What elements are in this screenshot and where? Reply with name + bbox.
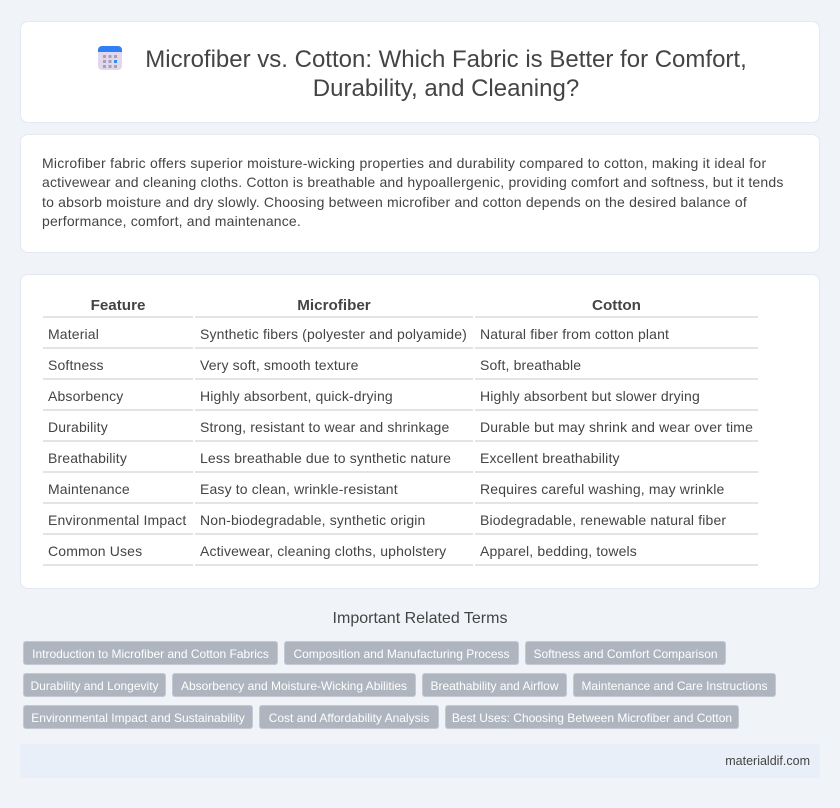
related term tags: Cost and Affordability Analysis bbox=[269, 711, 429, 725]
comparison table: Environmental Impact bbox=[48, 512, 186, 528]
panel: intro paragraph bbox=[20, 134, 820, 253]
related term tags: Composition and Manufacturing Process bbox=[293, 647, 510, 661]
panel: comparison table bbox=[20, 274, 820, 589]
comparison table: Durability bbox=[48, 419, 108, 435]
related term tags: Softness and Comfort Comparison bbox=[533, 647, 718, 661]
title: Microfiber vs. Cotton: Which Fabric is Better for Comfort, bbox=[145, 46, 747, 73]
comparison table: Very soft, smooth texture bbox=[200, 357, 359, 373]
comparison table: Common Uses bbox=[48, 543, 142, 559]
comparison table: Cotton bbox=[592, 297, 641, 314]
comparison table: Requires careful washing, may wrinkle bbox=[480, 481, 724, 497]
intro text: to absorb moisture and dry slowly. Choosing between microfiber and cotton depends on the desired balance of bbox=[42, 194, 747, 210]
related term tags bbox=[23, 641, 776, 729]
comparison table: Soft, breathable bbox=[480, 357, 581, 373]
header card bbox=[20, 21, 820, 123]
comparison table: Absorbency bbox=[48, 388, 123, 404]
intro text: performance, comfort, and maintenance. bbox=[42, 213, 301, 229]
comparison table: Biodegradable, renewable natural fiber bbox=[480, 512, 726, 528]
comparison table: Synthetic fibers (polyester and polyamide) bbox=[200, 326, 467, 342]
related term tags: Environmental Impact and Sustainability bbox=[31, 711, 245, 725]
comparison table: Apparel, bedding, towels bbox=[480, 543, 637, 559]
comparison table: Activewear, cleaning cloths, upholstery bbox=[200, 543, 446, 559]
title: Durability, and Cleaning? bbox=[313, 75, 579, 102]
comparison table: Excellent breathability bbox=[480, 450, 620, 466]
comparison table: Breathability bbox=[48, 450, 127, 466]
icon: calendar grid bbox=[98, 46, 122, 70]
comparison table: Feature bbox=[91, 297, 145, 314]
comparison table: Less breathable due to synthetic nature bbox=[200, 450, 451, 466]
intro text: Microfiber fabric offers superior moisture-wicking properties and durability compared to cotton, making it ideal for bbox=[42, 155, 766, 171]
related terms heading: Important Related Terms bbox=[333, 610, 507, 627]
related term tags: Maintenance and Care Instructions bbox=[581, 679, 768, 693]
related term tags: Durability and Longevity bbox=[30, 679, 159, 693]
comparison table: Easy to clean, wrinkle-resistant bbox=[200, 481, 398, 497]
related term tags: Absorbency and Moisture-Wicking Abilities bbox=[181, 679, 407, 693]
comparison table: Strong, resistant to wear and shrinkage bbox=[200, 419, 449, 435]
intro text bbox=[42, 155, 784, 229]
comparison table: Non-biodegradable, synthetic origin bbox=[200, 512, 426, 528]
comparison table: Highly absorbent but slower drying bbox=[480, 388, 700, 404]
comparison table: Microfiber bbox=[297, 297, 371, 314]
comparison table bbox=[43, 297, 758, 566]
title bbox=[145, 46, 747, 102]
footer bar bbox=[20, 744, 820, 778]
related term tags: Best Uses: Choosing Between Microfiber and Cotton bbox=[452, 711, 732, 725]
intro text: activewear and cleaning cloths. Cotton is breathable and hypoallergenic, providing comfort and softness, but it tends bbox=[42, 174, 784, 190]
comparison table: Natural fiber from cotton plant bbox=[480, 326, 669, 342]
comparison table: Durable but may shrink and wear over time bbox=[480, 419, 753, 435]
comparison table: Softness bbox=[48, 357, 104, 373]
comparison table: Highly absorbent, quick-drying bbox=[200, 388, 393, 404]
comparison table: Material bbox=[48, 326, 99, 342]
related term tags: Introduction to Microfiber and Cotton Fabrics bbox=[32, 647, 269, 661]
related term tags: Breathability and Airflow bbox=[430, 679, 559, 693]
comparison table: Maintenance bbox=[48, 481, 130, 497]
footer source text: materialdif.com bbox=[725, 754, 810, 768]
